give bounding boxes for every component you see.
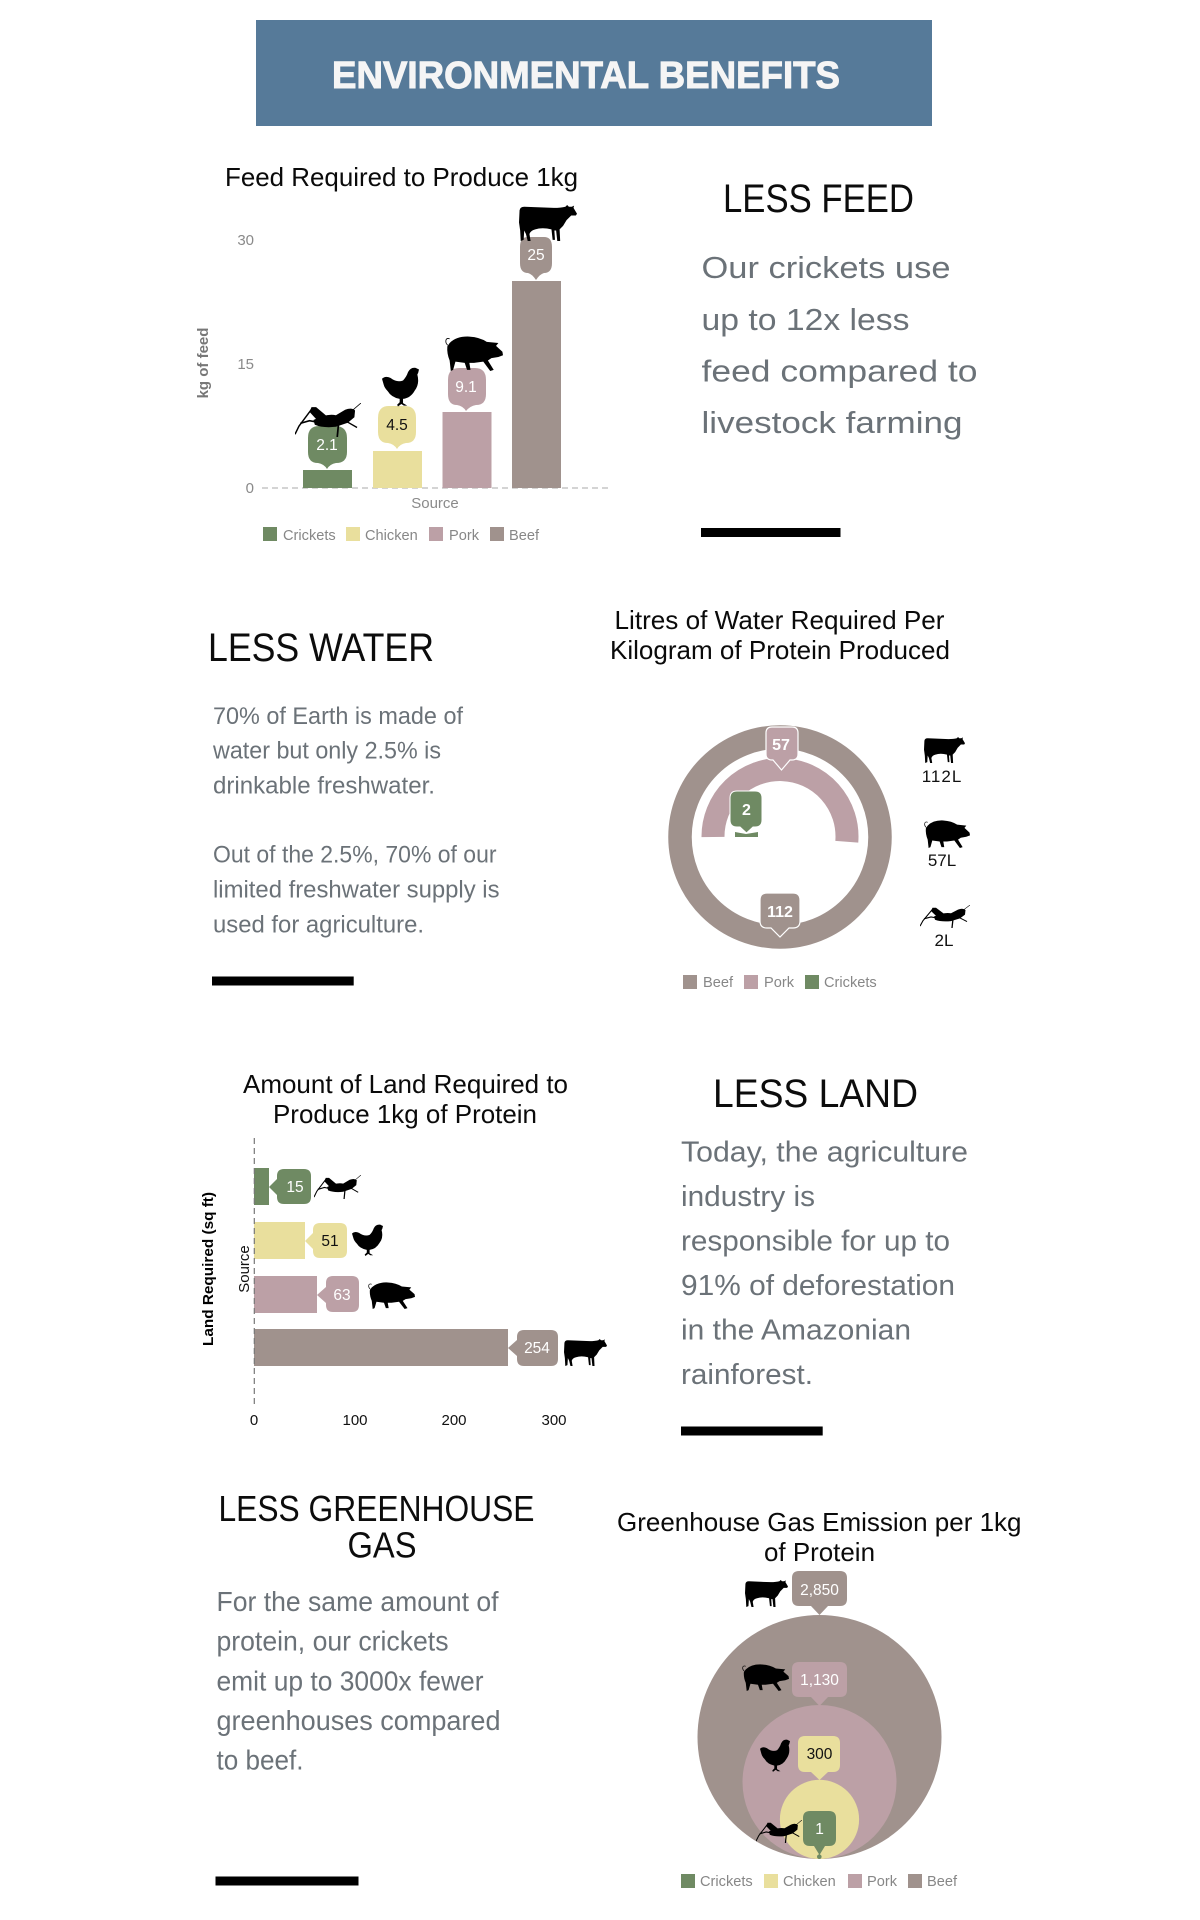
water tag: 112 [760,893,800,937]
feed legend [263,527,540,544]
body: less feed: feed compared to [702,354,978,388]
body: less greenhouse gas: to beef. [216,1744,304,1776]
heading: less greenhouse gas: GAS [348,1524,416,1566]
chart title: greenhouse: Greenhouse Gas Emission per 1kg [617,1507,1022,1537]
body: less land [681,1136,968,1391]
body: less land: industry is [681,1181,815,1213]
chart title: land [243,1069,568,1129]
land x axis ticks: 200 [441,1412,467,1429]
chart title: feed: Feed Required to Produce 1kg [225,162,578,192]
chart title: water: Litres of Water Required Per [614,605,945,635]
body: less water: 70% of Earth is made of [213,703,463,730]
greenhouse legend: Chicken [783,1874,836,1890]
chart title: water: Kilogram of Protein Produced [610,635,950,665]
icon: cow [519,205,577,241]
chart title: land: Produce 1kg of Protein [273,1099,537,1129]
land x axis ticks: 300 [541,1412,567,1429]
heading: less feed: LESS FEED [723,177,914,221]
land tag: 51 [305,1223,347,1258]
heading: less greenhouse gas: LESS GREENHOUSE [218,1488,534,1529]
heading: less greenhouse gas [218,1488,534,1566]
body: less land: rainforest. [681,1359,813,1391]
greenhouse legend [681,1874,958,1890]
icon: pig 57L [925,820,970,870]
ghg tag: 2,850 [792,1571,847,1615]
body: less land: in the Amazonian [681,1314,911,1346]
body: less greenhouse gas: greenhouses compared [216,1705,500,1736]
panel: less feed text [701,177,978,537]
land tag: 254: 254 [524,1340,550,1357]
body: less water: used for agriculture. [213,912,424,938]
water legend [683,975,877,991]
icon: cow [745,1580,788,1607]
feed legend: Chicken [365,528,418,544]
water legend: Beef [703,975,734,991]
ghg tag: 1,130 [792,1662,847,1706]
water tag: 57: 57 [772,737,790,754]
land source label: Source [236,1245,253,1293]
body: less greenhouse gas: For the same amount of [216,1586,499,1617]
land tag: 254 [508,1330,558,1366]
feed value tag: crickets 2.1 [308,426,347,469]
panel: feed bar chart [195,162,610,544]
ghg tag: 1 [803,1811,836,1855]
feed y axis ticks: 0 [246,480,254,497]
icon: cricket [756,1820,802,1843]
land x axis ticks: 100 [342,1412,368,1429]
icon: pig [369,1282,415,1309]
body: less feed: up to 12x less [702,302,910,337]
water tag: 2: 2 [742,802,751,819]
panel: greenhouse nested circles chart [617,1507,1022,1890]
land tag: 63 [317,1276,359,1312]
ghg tag: 1: 1 [815,1821,824,1838]
panel: less greenhouse gas text [216,1488,534,1886]
panel: less land text [681,1072,968,1436]
icon: chicken [352,1225,383,1256]
land tag: 15 [269,1169,311,1204]
chart title: greenhouse [617,1507,1022,1567]
body: less water [212,703,500,938]
land tag: 15: 15 [286,1179,304,1196]
greenhouse legend: Crickets [700,1874,753,1890]
heading: less water: LESS WATER [208,626,434,670]
feed legend: Crickets [283,528,336,544]
chart title: water [610,605,950,665]
crickets arc [735,832,758,837]
icon: cow 112L [922,737,965,786]
body: less land: Today, the agriculture [681,1136,968,1168]
land tag: 51: 51 [321,1233,339,1250]
body: less greenhouse gas [216,1586,500,1776]
body: less greenhouse gas: emit up to 3000x fewer [216,1666,484,1696]
body: less feed: livestock farming [702,405,962,440]
panel: less water text [208,626,500,986]
icon: cow [564,1339,607,1366]
ghg tag: 1,130: 1,130 [800,1672,839,1689]
chart title: greenhouse: of Protein [764,1537,875,1567]
land x axis ticks: 0 [250,1412,258,1429]
icon: chicken [760,1740,790,1772]
panel: land bar chart [200,1069,607,1429]
icon: cricket 2L [920,905,970,950]
chart title: land: Amount of Land Required to [243,1069,568,1099]
title banner [256,20,932,126]
feed value tag: pork 9.1 [448,368,486,411]
feed value tag: chicken 4.5: 4.5 [386,417,408,434]
heading: less land: LESS LAND [713,1072,918,1116]
ghg tag: 2,850: 2,850 [800,1582,839,1599]
icon: cow 112L: 112L [922,767,962,786]
feed value tag: beef 25 [520,237,552,280]
feed value tag: pork 9.1: 9.1 [455,379,477,396]
feed bars [303,281,561,488]
icon: cricket [314,1175,361,1199]
body: less land: 91% of deforestation [681,1270,955,1302]
feed x axis label: Source [411,495,459,512]
body: less water: Out of the 2.5%, 70% of our [213,842,496,868]
feed y axis ticks: 30 [237,232,254,249]
icon: cricket 2L: 2L [935,931,953,950]
feed legend: Pork [449,528,480,544]
nested circles [698,1615,942,1859]
title banner: ENVIRONMENTAL BENEFITS [332,55,840,97]
feed value tag: chicken 4.5 [378,406,416,449]
land bars [254,1168,508,1366]
icon: chicken [382,368,419,406]
land y axis label: Land Required (sq ft) [200,1192,217,1346]
feed y axis label: kg of feed [195,328,212,398]
body: less water: water but only 2.5% is [212,738,441,764]
feed value tag: beef 25: 25 [527,247,545,264]
water tag: 2 [730,791,762,833]
body: less feed: Our crickets use [702,250,950,285]
feed y axis ticks [237,232,254,497]
land x axis ticks [250,1412,567,1429]
body: less greenhouse gas: protein, our crickets [216,1626,448,1656]
land tag: 63: 63 [333,1287,351,1304]
pork arc [713,770,847,842]
body: less land: responsible for up to [681,1226,950,1258]
greenhouse legend: Pork [867,1874,898,1890]
ghg tag: 300: 300 [807,1746,833,1763]
water tag: 57 [766,727,798,770]
water legend: Crickets [824,975,877,991]
icon: cricket [295,403,361,437]
water legend: Pork [764,975,795,991]
panel: water radial chart [610,605,970,991]
body: less water: drinkable freshwater. [213,772,435,800]
icon: pig 57L: 57L [928,851,956,870]
icon: pig [743,1664,789,1691]
ghg tag: 300 [798,1736,840,1780]
icon: pig [446,337,503,371]
feed y axis ticks: 15 [237,356,254,373]
body: less water: limited freshwater supply is [213,876,500,904]
beef ring [680,737,880,937]
feed legend: Beef [509,528,540,544]
feed value tag: crickets 2.1: 2.1 [316,437,338,454]
water tag: 112: 112 [767,904,793,921]
greenhouse legend: Beef [927,1874,958,1890]
body: less feed [702,250,978,440]
